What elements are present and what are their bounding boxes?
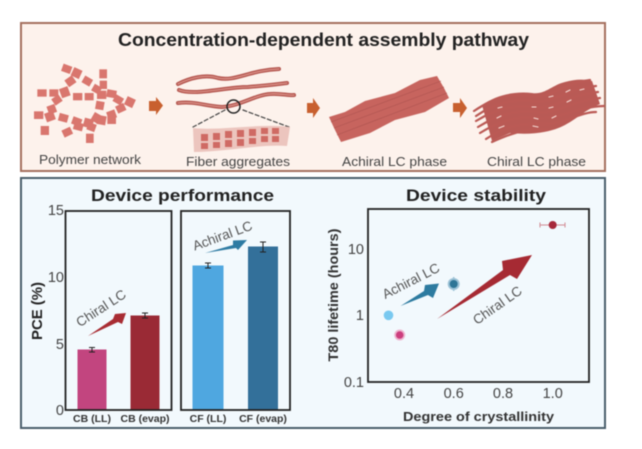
x labels bbox=[73, 413, 287, 425]
illustration: fiber aggregates bbox=[178, 69, 294, 127]
x labels: CB (evap) bbox=[120, 413, 170, 425]
plot frame bbox=[368, 209, 589, 382]
magnifier ring bbox=[227, 100, 240, 113]
illustration: chiral LC phase bbox=[474, 80, 604, 142]
bar: CB (evap) bbox=[130, 316, 160, 410]
y axis ticks: 15 bbox=[48, 203, 64, 219]
title: assembly pathway: Concentration-dependent assembly pathway bbox=[118, 29, 530, 50]
y axis ticks: 10 bbox=[48, 270, 64, 286]
y ticks: 10 bbox=[348, 242, 364, 258]
axis title y: T80 lifetime (hours) bbox=[326, 228, 341, 362]
bar: CB (LL) bbox=[78, 350, 106, 410]
label: chiral LC: Chiral LC bbox=[73, 286, 129, 330]
x ticks: 0.8 bbox=[493, 386, 513, 402]
icon: arrow 2 bbox=[307, 98, 320, 118]
label: chiral LC: Chiral LC bbox=[470, 283, 525, 328]
heading: device performance: Device performance bbox=[91, 186, 274, 205]
arrow: chiral LC bbox=[88, 313, 126, 336]
x labels: CF (evap) bbox=[239, 413, 287, 425]
bar: CF (LL) bbox=[192, 266, 224, 410]
error bars bbox=[89, 242, 266, 352]
y ticks: 1 bbox=[356, 308, 364, 324]
point: CF LL bbox=[384, 310, 393, 320]
heading: device stability: Device stability bbox=[406, 186, 547, 205]
point: CB LL bbox=[394, 330, 405, 340]
arrow: achiral LC bbox=[400, 284, 439, 306]
arrow: achiral LC bbox=[205, 240, 247, 253]
caption: achiral LC phase: Achiral LC phase bbox=[342, 155, 447, 169]
illustration: achiral LC phase bbox=[329, 76, 449, 142]
axis title x: Degree of crystallinity bbox=[403, 409, 555, 424]
panel: assembly pathway bbox=[21, 23, 605, 171]
bar chart: PCE bbox=[30, 203, 290, 425]
x ticks: 0.6 bbox=[444, 386, 464, 402]
caption: polymer network: Polymer network bbox=[39, 153, 142, 167]
y ticks bbox=[344, 242, 364, 391]
illustration: polymer network bbox=[34, 64, 136, 143]
x ticks: 0.4 bbox=[394, 386, 414, 402]
x labels: CB (LL) bbox=[73, 413, 111, 425]
label: achiral LC: Achiral LC bbox=[380, 260, 442, 302]
caption: chiral LC phase: Chiral LC phase bbox=[487, 155, 586, 169]
x ticks: 1.0 bbox=[543, 386, 563, 402]
axis title: PCE (%) bbox=[30, 282, 46, 340]
y axis ticks bbox=[48, 203, 64, 419]
scatter chart: T80 vs crystallinity bbox=[326, 209, 589, 424]
point: CB evap bbox=[540, 221, 565, 229]
bar: CF (evap) bbox=[248, 246, 278, 410]
point: CF evap bbox=[448, 277, 460, 291]
icon: arrow 1 bbox=[149, 97, 163, 115]
icon: arrow 3 bbox=[453, 98, 467, 118]
caption: fiber aggregates: Fiber aggregates bbox=[186, 155, 290, 169]
illustration: fiber zoom inset bbox=[193, 126, 290, 152]
y axis ticks: 0 bbox=[56, 403, 64, 419]
arrow: chiral LC bbox=[437, 255, 532, 319]
fiber highlights bbox=[178, 69, 294, 107]
y ticks: 0.1 bbox=[344, 375, 364, 391]
panel: device results bbox=[21, 178, 605, 428]
chiral strands bbox=[474, 80, 604, 142]
x labels: CF (LL) bbox=[190, 413, 226, 425]
y axis ticks: 5 bbox=[56, 337, 64, 353]
x ticks bbox=[394, 386, 563, 402]
chart frames bbox=[66, 211, 290, 410]
label: achiral LC: Achiral LC bbox=[191, 218, 255, 253]
chiral strand gaps bbox=[497, 89, 584, 128]
